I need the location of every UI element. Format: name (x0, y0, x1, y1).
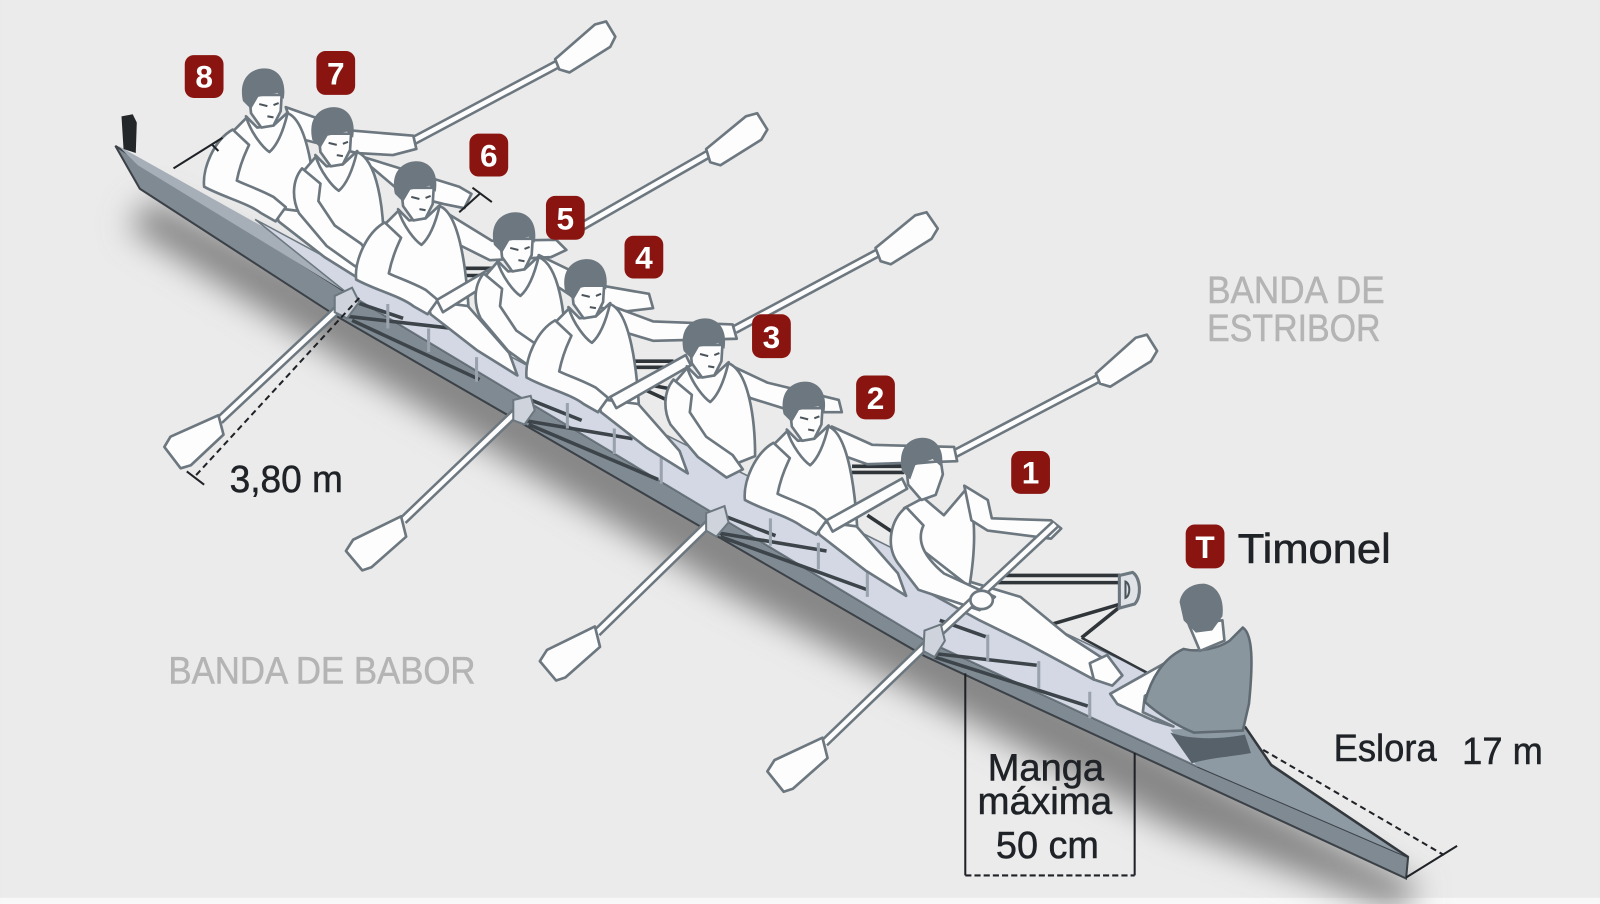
oarlocks (335, 288, 945, 657)
rower 5 (476, 212, 653, 371)
starboard oars (413, 21, 1157, 454)
cockpit (1170, 733, 1251, 763)
face (906, 461, 943, 500)
badge 3: 3 (763, 319, 780, 355)
badge 6 (469, 134, 508, 177)
badge 2: 2 (867, 380, 884, 416)
label: maximum beam: máxima (978, 780, 1112, 822)
rower 1 (891, 438, 1122, 686)
boat hull (115, 146, 1408, 878)
label: length (1334, 727, 1543, 772)
label: port side: BANDA DE BABOR (168, 650, 476, 692)
oar D (954, 335, 1157, 454)
near riggers (347, 302, 1090, 718)
rower 3 (665, 318, 842, 478)
oar G (540, 512, 720, 681)
hull shadow (128, 199, 1420, 904)
main deck (255, 219, 1241, 766)
oar E (164, 296, 352, 468)
right arm (964, 486, 1061, 539)
label: Timonel: Timonel (1238, 525, 1391, 572)
rower 4 (526, 259, 737, 473)
badge 3 (752, 314, 791, 358)
label: maximum beam: Manga (988, 747, 1104, 789)
left arm (891, 507, 995, 610)
label: oar length: 3,80 m (230, 458, 343, 500)
oarlock D (1119, 572, 1139, 608)
dimension: length (1263, 750, 1457, 877)
badge 7 (316, 51, 355, 95)
hair (901, 438, 942, 480)
hand (970, 591, 993, 609)
badge 1: 1 (1022, 455, 1039, 491)
dimension: oar length (187, 298, 359, 485)
handle (934, 524, 1055, 638)
label: starboard side: BANDA DE (1207, 269, 1385, 311)
rower 6 (356, 161, 566, 375)
coxswain legs (1110, 661, 1173, 726)
coxswain (1110, 584, 1251, 733)
rower 2 (745, 382, 957, 596)
port oars (164, 296, 934, 792)
coxswain sweater (1145, 627, 1251, 733)
badge 8 (185, 55, 224, 98)
torso (904, 488, 974, 587)
oar B (582, 113, 767, 227)
dimension: oar span marker (459, 188, 492, 212)
hull side (115, 146, 1408, 878)
label: starboard side: ESTRIBOR (1207, 307, 1381, 349)
bow deck (118, 146, 352, 293)
label: length: 17 m (1462, 730, 1543, 772)
dimension: bow tick (174, 138, 223, 168)
foot (1090, 655, 1122, 686)
oar A (413, 21, 615, 141)
legs (918, 546, 1107, 680)
rower 7 (294, 107, 471, 266)
oar H (767, 638, 934, 792)
coxswain head (1180, 584, 1223, 633)
stern deck (1170, 726, 1408, 857)
badge 2 (856, 375, 895, 419)
far riggers (462, 268, 1139, 638)
coxswain neck (1189, 620, 1224, 651)
badge 4 (625, 236, 663, 279)
badge 1 (1011, 451, 1050, 494)
label: maximum beam (978, 747, 1112, 866)
bow fin (121, 114, 137, 153)
badge T (1186, 524, 1224, 568)
badge 5: 5 (557, 201, 574, 237)
badge 4: 4 (635, 239, 653, 275)
rower 8 (204, 68, 416, 283)
label: starboard side (1207, 269, 1385, 349)
badge T: T (1195, 529, 1215, 565)
label: length: Eslora (1334, 727, 1437, 769)
dimension: beam box (965, 673, 1135, 875)
badge 8: 8 (195, 59, 213, 95)
oar F (346, 401, 528, 570)
far gunwale dark edge (1082, 638, 1408, 857)
badge 7: 7 (327, 56, 345, 92)
oar C (735, 212, 938, 330)
label: maximum beam: 50 cm (996, 824, 1099, 866)
badge 5 (546, 196, 585, 240)
badge 6: 6 (480, 137, 498, 173)
